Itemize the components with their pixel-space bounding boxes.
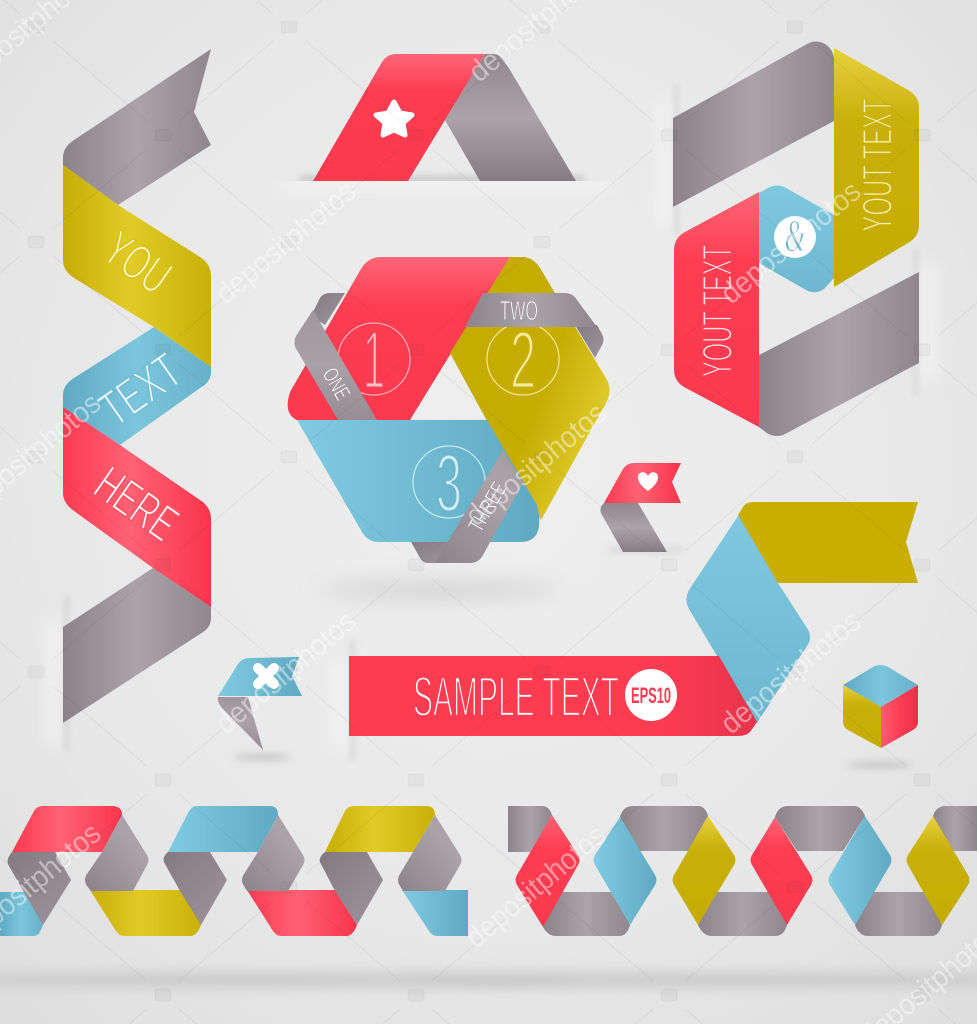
blue end bbox=[402, 890, 468, 936]
floor shadow bbox=[320, 584, 560, 596]
circle and number 2 bbox=[487, 315, 559, 406]
red top bbox=[12, 806, 122, 852]
yellow panel bbox=[834, 48, 919, 287]
red band bbox=[349, 656, 757, 736]
circle and number 1: 1 bbox=[363, 315, 385, 406]
ampersand badge bbox=[774, 210, 816, 261]
small x flag bbox=[218, 657, 302, 760]
red segment bbox=[63, 407, 211, 607]
cube bbox=[843, 665, 918, 768]
circle and number 1 bbox=[338, 315, 410, 406]
grey link 1 bbox=[8, 852, 71, 925]
base shadow bbox=[608, 548, 683, 552]
red diamond 2 bbox=[750, 817, 812, 925]
ribbon cut shadows bbox=[656, 85, 936, 395]
sample text ribbon bbox=[332, 502, 918, 760]
text: YOU: YOU bbox=[94, 220, 181, 305]
blue segment bbox=[63, 327, 211, 445]
watermark text: depositphotos bbox=[209, 605, 362, 741]
blue centre bbox=[759, 186, 834, 292]
yellow section bbox=[450, 257, 610, 520]
label: THREE: THREE bbox=[463, 477, 512, 536]
grey link 2 bbox=[85, 815, 148, 891]
grey bottom 1 bbox=[543, 892, 630, 936]
band one bbox=[294, 310, 377, 420]
floor shadow bbox=[847, 762, 913, 768]
circle and number 2: 2 bbox=[510, 315, 536, 406]
grey bottom 2 bbox=[698, 892, 787, 936]
grey leg bbox=[600, 503, 667, 552]
blue section bbox=[297, 420, 539, 542]
badge: EPS10 bbox=[625, 669, 677, 721]
right ribbon with ampersand bbox=[656, 42, 936, 436]
yellow diamond 2 bbox=[906, 816, 970, 925]
band three bbox=[435, 450, 523, 563]
grey flag end bbox=[63, 49, 211, 205]
grey leg bbox=[445, 54, 576, 181]
grey top 4 bbox=[933, 806, 977, 851]
grey link 4 bbox=[242, 815, 304, 891]
text: SAMPLE TEXT: SAMPLE TEXT bbox=[413, 665, 619, 729]
watermark text: depositphotos bbox=[714, 605, 867, 741]
grey lower end bbox=[63, 568, 211, 723]
blue top face bbox=[843, 665, 918, 707]
circle and number 3 bbox=[413, 438, 485, 529]
blue start bbox=[0, 892, 43, 936]
band folds behind bbox=[311, 293, 604, 563]
blue flag bbox=[218, 657, 302, 696]
yellow flag bbox=[738, 502, 918, 583]
red bottom bbox=[247, 890, 357, 936]
yellow diamond 1 bbox=[672, 816, 736, 925]
base shadow bbox=[298, 174, 587, 181]
watermark text: depositphotos bbox=[459, 397, 612, 533]
grey top 3 bbox=[775, 806, 865, 851]
yellow left face bbox=[843, 685, 881, 748]
bottom left chain ribbon bbox=[0, 806, 468, 936]
grey link 5 bbox=[320, 852, 383, 925]
grey bottom 3 bbox=[855, 892, 942, 936]
label: TWO: TWO bbox=[500, 295, 538, 326]
band two bbox=[465, 293, 597, 327]
top folded A ribbon bbox=[298, 54, 587, 181]
circle and number 3: 3 bbox=[436, 438, 462, 529]
red section bbox=[288, 257, 510, 420]
blue fold bbox=[686, 513, 810, 723]
grey top 1 bbox=[508, 806, 552, 852]
grey top 2 bbox=[620, 806, 708, 851]
red diamond 1 bbox=[516, 815, 580, 927]
watermark text: depositphotos bbox=[714, 175, 867, 311]
bottom right chain ribbon bbox=[508, 806, 977, 936]
blue top bbox=[168, 806, 278, 852]
grey bottom band bbox=[759, 272, 919, 436]
grey link 3 bbox=[164, 852, 227, 925]
label: ONE: ONE bbox=[317, 363, 356, 404]
icon: heart bbox=[638, 472, 658, 491]
blue diamond 2 bbox=[828, 816, 892, 925]
badge: EPS10: EPS10 bbox=[631, 683, 671, 708]
ribbon cut shadow bbox=[46, 596, 69, 751]
red leg bbox=[313, 54, 485, 181]
yellow segment bbox=[63, 165, 211, 367]
watermark text: depositphotos bbox=[459, 819, 612, 955]
icon: cross bbox=[258, 668, 274, 684]
floor shadow band bbox=[0, 974, 977, 986]
red flag bbox=[604, 463, 681, 503]
tall left ribbon bbox=[46, 49, 211, 751]
red panel bbox=[674, 192, 759, 427]
red right face bbox=[881, 685, 918, 748]
small heart flag bbox=[600, 463, 683, 552]
numbered hexagon ribbon bbox=[288, 257, 610, 596]
yellow bottom bbox=[90, 890, 201, 936]
text: TEXT: TEXT bbox=[89, 342, 192, 437]
grey leg bbox=[218, 697, 263, 750]
base shadow bbox=[234, 754, 290, 760]
text: YOUT TEXT yellow: YOUT TEXT bbox=[854, 98, 900, 232]
watermark text: depositphotos bbox=[209, 175, 362, 311]
grey top band bbox=[673, 42, 834, 207]
yellow top bbox=[325, 806, 435, 852]
grey link 6 bbox=[398, 815, 462, 891]
icon: star bbox=[376, 102, 412, 135]
ribbon cut shadow bbox=[332, 640, 355, 760]
ampersand badge: & bbox=[784, 210, 806, 261]
text: HERE: HERE bbox=[84, 456, 189, 552]
text: YOUT TEXT red: YOUT TEXT bbox=[694, 245, 740, 377]
blue diamond 1 bbox=[594, 817, 656, 925]
